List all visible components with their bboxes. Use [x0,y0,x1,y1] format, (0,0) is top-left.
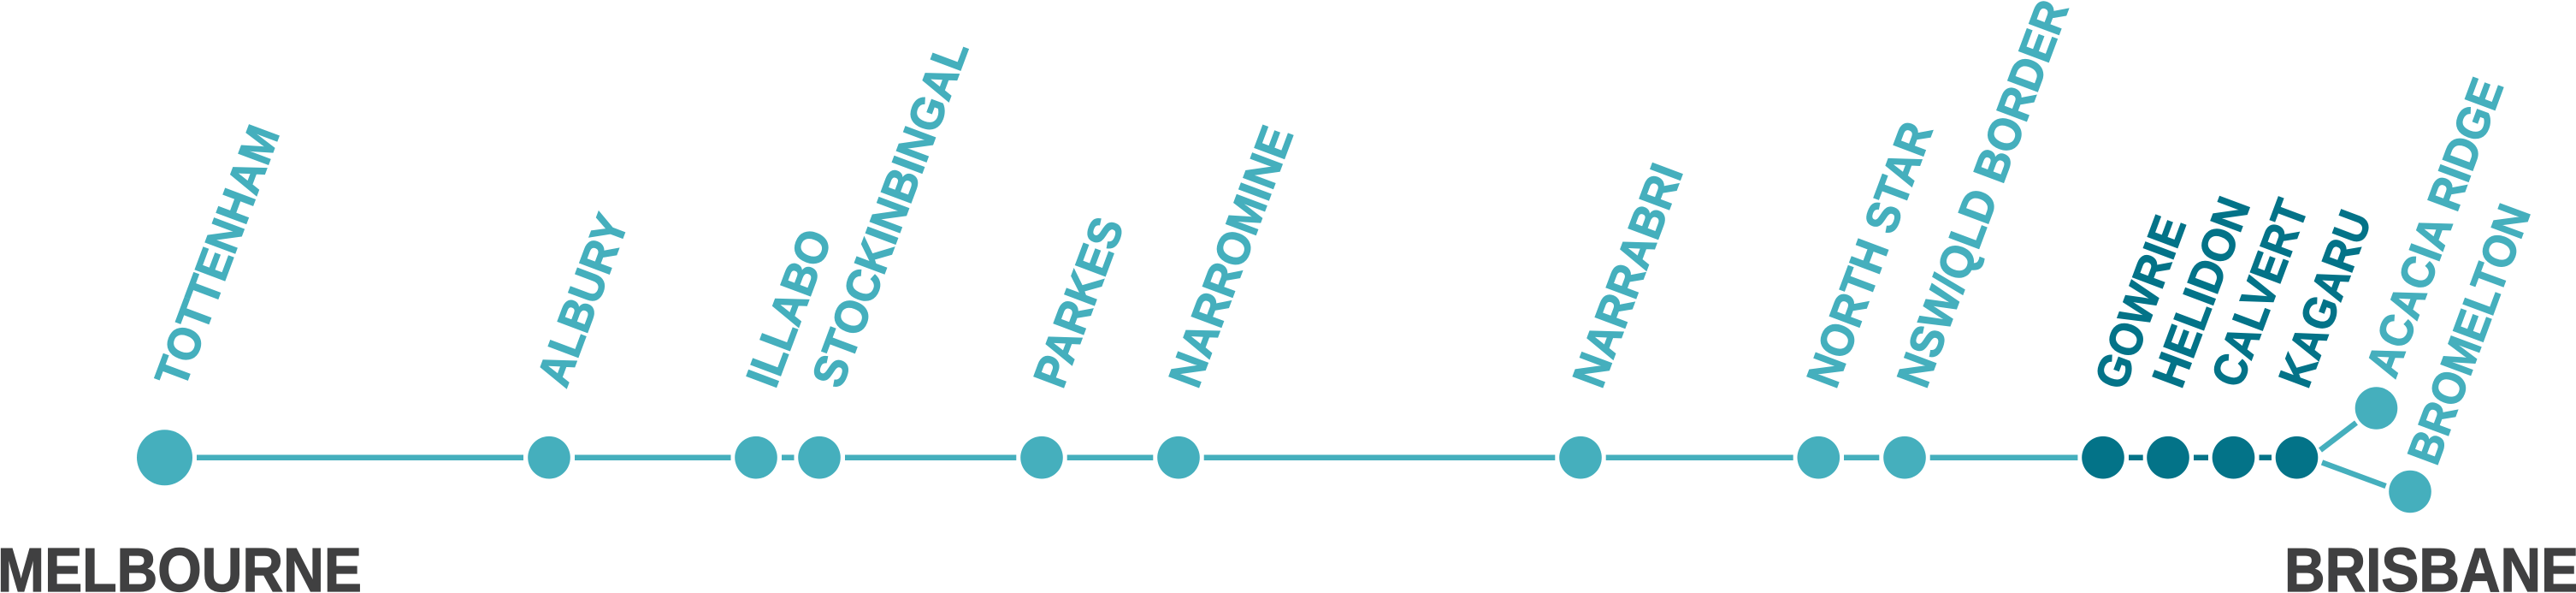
label: Tottenham: TOTTENHAM [145,119,290,394]
label: North Star: NORTH STAR [1798,116,1943,394]
label: Stockinbingal: STOCKINBINGAL [802,33,978,394]
station markers: light teal [137,387,2431,513]
label: Narromine: NARROMINE [1160,119,1303,394]
label: Parkes: PARKES [1025,211,1134,394]
branch line to Acacia Ridge [2320,423,2356,450]
label: Kagaru: KAGARU [2269,204,2382,394]
label: Narrabri: NARRABRI [1563,157,1693,394]
label: Helidon: HELIDON [2143,190,2260,394]
label: Acacia Ridge: ACACIA RIDGE [2356,72,2514,383]
route line: dark teal segments [2129,454,2272,460]
label: Illabo: ILLABO [737,222,842,394]
station markers: dark teal [2082,436,2318,479]
label: Albury: ALBURY [528,207,638,393]
branch line to Bromelton [2322,462,2386,486]
label: Gowrie: GOWRIE [2085,209,2196,395]
label: Calvert: CALVERT [2202,193,2318,394]
label: Bromelton: BROMELTON [2398,198,2541,471]
route line: light teal segments [197,454,2077,460]
